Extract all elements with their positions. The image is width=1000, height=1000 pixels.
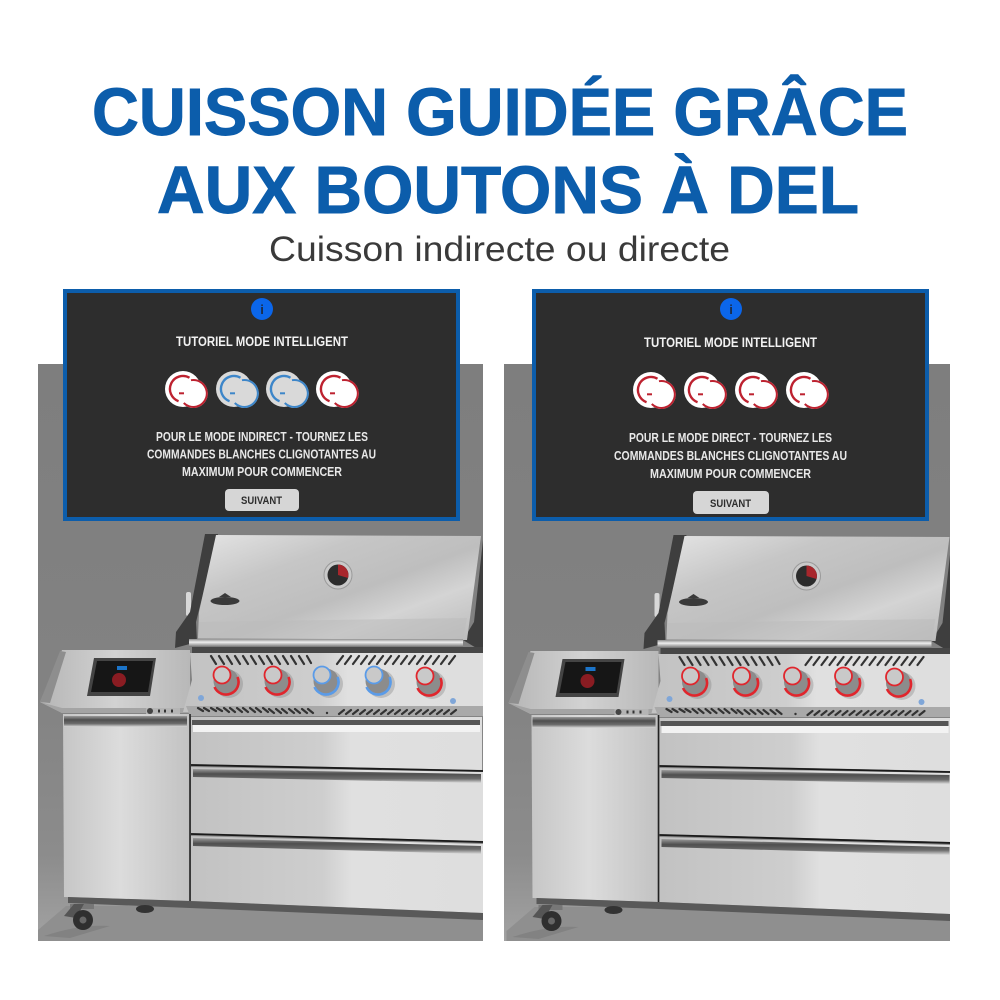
button: suivant [225,489,299,511]
icon: info: i [729,302,733,317]
title: CUISSON GUIDÉE GRÂCE [92,75,908,150]
icon: info: i [260,302,264,317]
knob diagrams [165,371,359,408]
instructions: COMMANDES BLANCHES CLIGNOTANTES AU [147,448,376,462]
grill illustration: left [38,534,483,941]
instructions: MAXIMUM POUR COMMENCER [650,467,811,481]
instructions: MAXIMUM POUR COMMENCER [182,465,342,479]
panel: direct mode tutorial screen [534,291,927,519]
panel: indirect mode tutorial screen [65,291,458,519]
instructions [614,431,847,481]
panel: right grill photo, direct mode [504,364,952,942]
icon: info [720,298,742,320]
title: AUX BOUTONS À DEL [157,153,859,228]
panel: left grill photo, indirect mode [38,364,483,941]
grill knobs: red, red, blue, blue, red [214,666,446,699]
grill illustration: right [506,535,952,942]
button: suivant: SUIVANT [710,498,751,510]
button: suivant: SUIVANT [241,495,282,507]
knob diagrams [633,372,829,409]
button: suivant [693,491,769,514]
instructions: COMMANDES BLANCHES CLIGNOTANTES AU [614,449,847,463]
tutorial heading: TUTORIEL MODE INTELLIGENT [644,335,818,350]
subtitle: Cuisson indirecte ou directe [269,230,730,269]
grill knobs: all red [682,668,916,700]
instructions [147,430,376,479]
icon: info [251,298,273,320]
title [92,75,908,228]
tutorial heading: TUTORIEL MODE INTELLIGENT [176,334,349,349]
instructions: POUR LE MODE INDIRECT - TOURNEZ LES [156,430,368,444]
instructions: POUR LE MODE DIRECT - TOURNEZ LES [629,431,832,445]
